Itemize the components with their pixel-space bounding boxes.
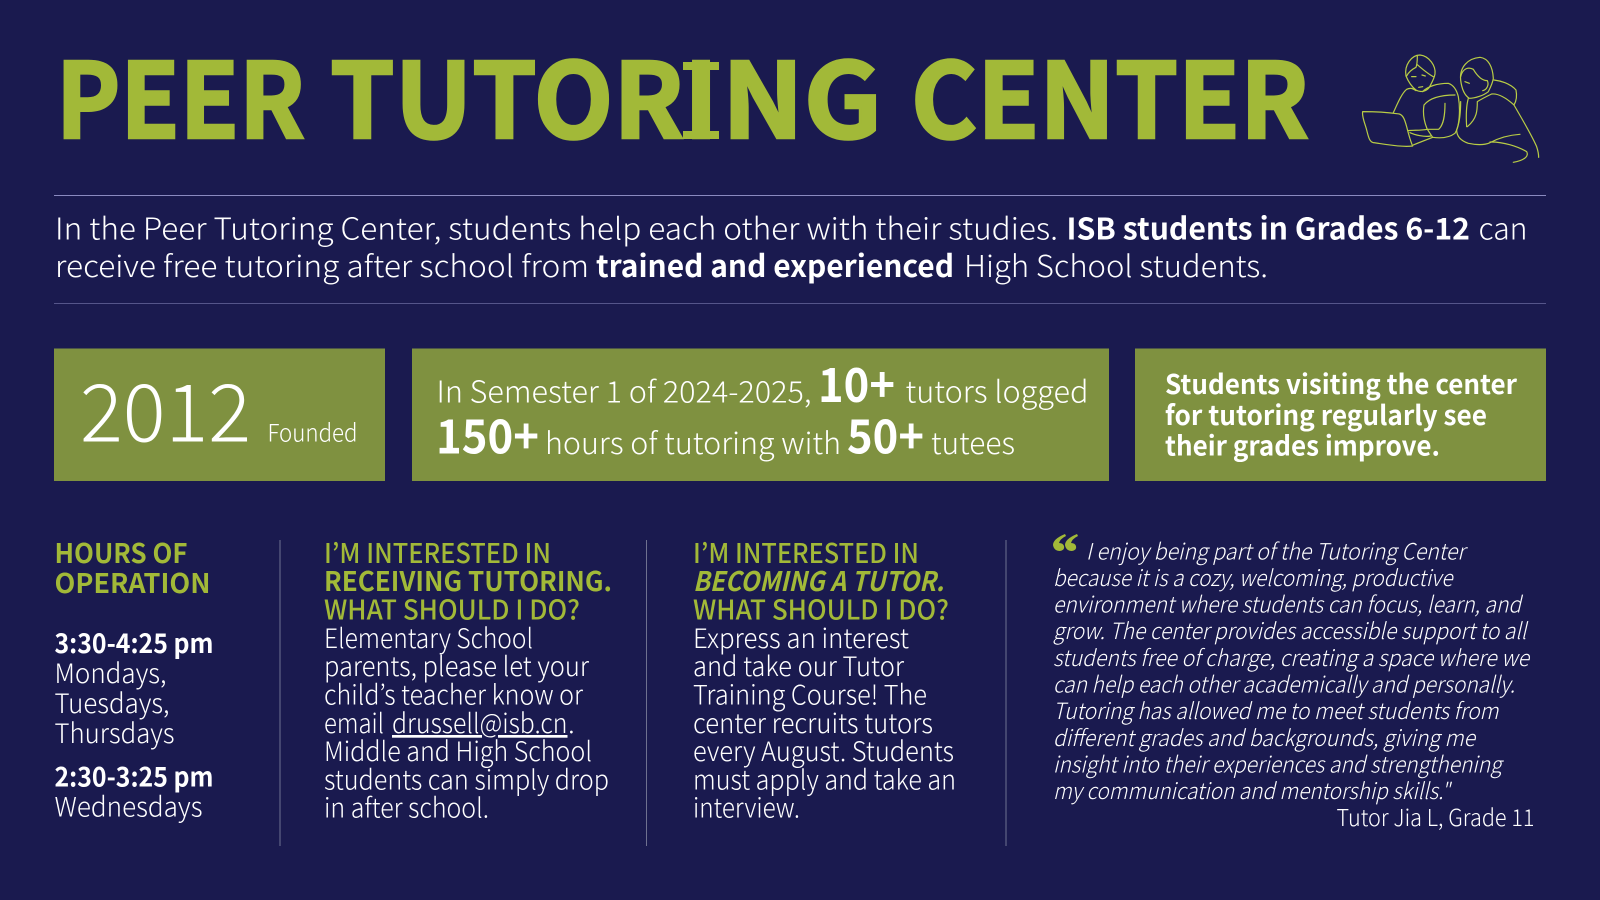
column: becoming a tutor: every August. Students (693, 730, 954, 769)
panel: founded (54, 348, 385, 481)
hours of operation (54, 532, 214, 824)
text block: introduction: ISB students in Grades 6-12 (1066, 204, 1470, 248)
quote: tutor testimonial: because it is a cozy, welcoming, productive (1053, 561, 1454, 593)
quote: tutor testimonial (1053, 534, 1534, 833)
icon: quotation mark (1053, 534, 1078, 551)
quote: tutor testimonial: my communication and mentorship skills." (1053, 774, 1452, 806)
panel: grades improve: their grades improve. (1165, 424, 1440, 464)
column: becoming a tutor: and take our Tutor (693, 645, 904, 684)
column: receiving tutoring: in after school. (324, 786, 489, 826)
panel: semester stats: 150+ (436, 398, 539, 468)
hours of operation: 3:30-4:25 pm (54, 622, 214, 661)
column: receiving tutoring: email (324, 702, 384, 741)
column: receiving tutoring: Elementary School (324, 617, 533, 656)
title (56, 17, 1309, 168)
text block: introduction: In the Peer Tutoring Center, students help each other with their studies. (55, 204, 1058, 248)
column: receiving tutoring: I’M INTERESTED IN (324, 532, 551, 571)
title: TUTOR (330, 17, 684, 168)
panel: semester stats: In Semester 1 of 2024-2025, (436, 368, 812, 412)
quote: tutor testimonial: Tutor Jia L, Grade 11 (1336, 799, 1534, 833)
text block: introduction: can (1478, 204, 1528, 248)
panel: semester stats: 10+ (818, 347, 895, 416)
hours of operation: HOURS OF (54, 532, 188, 571)
text block: introduction: receive free tutoring after school from (55, 242, 589, 286)
hours of operation: OPERATION (54, 562, 210, 601)
text block: introduction: High School students. (964, 242, 1268, 286)
column: receiving tutoring: RECEIVING TUTORING. (324, 560, 612, 599)
title: PEER (56, 17, 305, 168)
panel: semester stats: tutees (931, 419, 1015, 463)
column: becoming a tutor: Express an interest (693, 617, 909, 656)
column: becoming a tutor: center recruits tutors (693, 702, 933, 741)
panel: semester stats: hours of tutoring with (545, 419, 841, 463)
panel: semester stats: tutors logged (906, 368, 1088, 412)
hours of operation: Thursdays (54, 712, 174, 751)
quote: tutor testimonial: grow. The center provides accessible support to all (1053, 614, 1529, 646)
column: receiving tutoring: parents, please let your (324, 645, 589, 684)
quote: tutor testimonial: different grades and backgrounds, giving me (1053, 721, 1477, 753)
panel: semester stats (412, 347, 1109, 481)
quote: tutor testimonial: environment where students can focus, learn, and (1053, 588, 1523, 620)
quote: tutor testimonial: Tutoring has allowed me to meet students from (1053, 694, 1499, 726)
panel: semester stats: 50+ (847, 398, 924, 468)
column: becoming a tutor: BECOMING A TUTOR. (693, 560, 944, 599)
quote: tutor testimonial: can help each other academically and personally. (1053, 668, 1515, 700)
quote: tutor testimonial: I enjoy being part of the Tutoring Center (1086, 534, 1469, 566)
column: receiving tutoring: students can simply drop (324, 758, 609, 798)
column: becoming a tutor (693, 532, 956, 826)
panel: founded: Founded (268, 414, 358, 448)
column: receiving tutoring: drussell@isb.cn (392, 702, 568, 741)
hours of operation: 2:30-3:25 pm (54, 756, 214, 794)
column: receiving tutoring: Middle and High School (324, 730, 592, 769)
column: becoming a tutor: WHAT SHOULD I DO? (693, 588, 949, 628)
text block: introduction: trained and experienced (596, 242, 954, 286)
quote: tutor testimonial: insight into their experiences and strengthening (1053, 748, 1504, 780)
column: receiving tutoring (324, 532, 612, 826)
panel: grades improve: Students visiting the center (1165, 363, 1517, 402)
hours of operation: Wednesdays (54, 786, 202, 824)
column: becoming a tutor: I’M INTERESTED IN (693, 532, 919, 571)
quote: tutor testimonial: students free of charge, creating a space where we (1053, 641, 1531, 673)
title: NG (722, 17, 882, 168)
title: I (684, 17, 718, 168)
divider top (54, 195, 1546, 196)
panel: grades improve: for tutoring regularly see (1165, 394, 1487, 433)
column: receiving tutoring: child’s teacher know or (324, 674, 583, 712)
panel: founded: 2012 (80, 350, 251, 466)
column: receiving tutoring: . (568, 702, 575, 741)
title: CENTER (911, 17, 1309, 168)
column: becoming a tutor: interview. (693, 786, 800, 826)
hours of operation: Tuesdays, (54, 682, 170, 721)
column: receiving tutoring: WHAT SHOULD I DO? (324, 588, 580, 628)
divider bottom (54, 303, 1546, 304)
hours of operation: Mondays, (54, 652, 166, 691)
column: becoming a tutor: must apply and take an (693, 758, 956, 798)
column: becoming a tutor: Training Course! The (693, 674, 927, 712)
panel: grades improve (1135, 348, 1546, 481)
text block: introduction (55, 204, 1528, 286)
icon: two students at a laptop (1362, 55, 1539, 162)
